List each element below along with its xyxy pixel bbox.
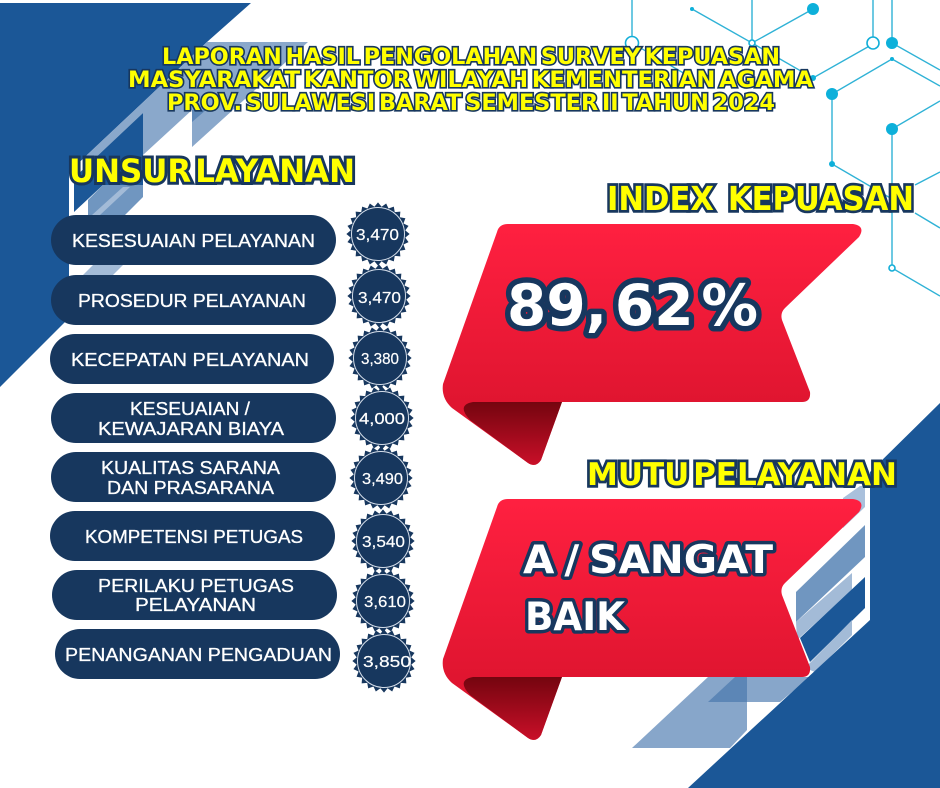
value: a / sangat baik: [523, 538, 773, 640]
badges: scores: [346, 202, 416, 693]
title: [128, 45, 813, 116]
pill: kecepatan pelayanan: KECEPATAN PELAYANAN: [71, 350, 309, 370]
pill: kompetensi petugas: KOMPETENSI PETUGAS: [85, 527, 303, 547]
badge: 3,610: 3,610: [364, 594, 406, 611]
pill: prosedur pelayanan: PROSEDUR PELAYANAN: [78, 291, 306, 311]
pill: kompetensi petugas: [50, 511, 335, 561]
badge: 3,470: 3,470: [356, 227, 399, 244]
pill: keseuaian / kewajaran biaya: KEWAJARAN BIAYA: [98, 419, 284, 439]
pill: kesesuaian pelayanan: KESESUAIAN PELAYANAN: [72, 231, 315, 251]
background: bottom-right blue shape: [632, 403, 940, 788]
badge: 3,470: 3,470: [358, 290, 401, 307]
pill: perilaku petugas pelayanan: PERILAKU PETUGAS: [98, 576, 294, 596]
heading: mutu pelayanan: MUTU PELAYANAN: [587, 457, 897, 493]
value: a / sangat baik: A / SANGAT: [523, 538, 773, 583]
badge: 4,000: [350, 386, 414, 450]
badge: 3,850: 3,850: [363, 654, 411, 671]
badge: 3,470: [347, 264, 411, 328]
pill: kesesuaian pelayanan: [51, 215, 336, 265]
badge: 3,470: [346, 202, 410, 266]
ribbon: quality value: [443, 499, 861, 740]
badge: 3,540: 3,540: [362, 534, 405, 551]
background: top-left blue shape: [0, 3, 308, 387]
pill: keseuaian / kewajaran biaya: [51, 393, 336, 443]
title: LAPORAN HASIL PENGOLAHAN SURVEY KEPUASAN: [162, 45, 780, 70]
pill: kualitas sarana dan prasarana: KUALITAS SARANA: [101, 458, 280, 478]
pill: prosedur pelayanan: [51, 275, 336, 325]
pill: keseuaian / kewajaran biaya: KESEUAIAN /: [130, 399, 250, 419]
pill: kualitas sarana dan prasarana: DAN PRASARANA: [107, 478, 274, 498]
pill: penanganan pengaduan: [55, 629, 340, 679]
badge: 3,850: [352, 629, 416, 693]
title: PROV. SULAWESI BARAT SEMESTER II TAHUN 2024: [167, 91, 775, 116]
badge: 3,490: 3,490: [362, 471, 403, 488]
heading: index kepuasan: INDEX KEPUASAN: [607, 179, 914, 218]
badge: 3,610: [351, 569, 415, 633]
value: a / sangat baik: BAIK: [525, 595, 627, 640]
pill: kualitas sarana dan prasarana: [51, 452, 336, 502]
badge: 3,490: [349, 446, 413, 510]
ribbon: index value: [443, 224, 861, 465]
list: service elements: [50, 215, 340, 679]
pill: perilaku petugas pelayanan: PELAYANAN: [135, 595, 256, 615]
pill: kecepatan pelayanan: [50, 334, 334, 384]
title: MASYARAKAT KANTOR WILAYAH KEMENTERIAN AGAMA: [128, 68, 813, 93]
pill: perilaku petugas pelayanan: [52, 570, 337, 620]
badge: 4,000: 4,000: [359, 411, 405, 428]
value: 89,62 %: 89, 62 %: [507, 273, 758, 339]
heading: unsur layanan: UNSUR LAYANAN: [69, 152, 355, 190]
pill: penanganan pengaduan: PENANGANAN PENGADUAN: [65, 645, 332, 665]
hexagon network decoration: [626, 0, 940, 296]
badge: 3,380: 3,380: [361, 351, 399, 368]
badge: 3,540: [351, 509, 415, 573]
badge: 3,380: [348, 326, 412, 390]
